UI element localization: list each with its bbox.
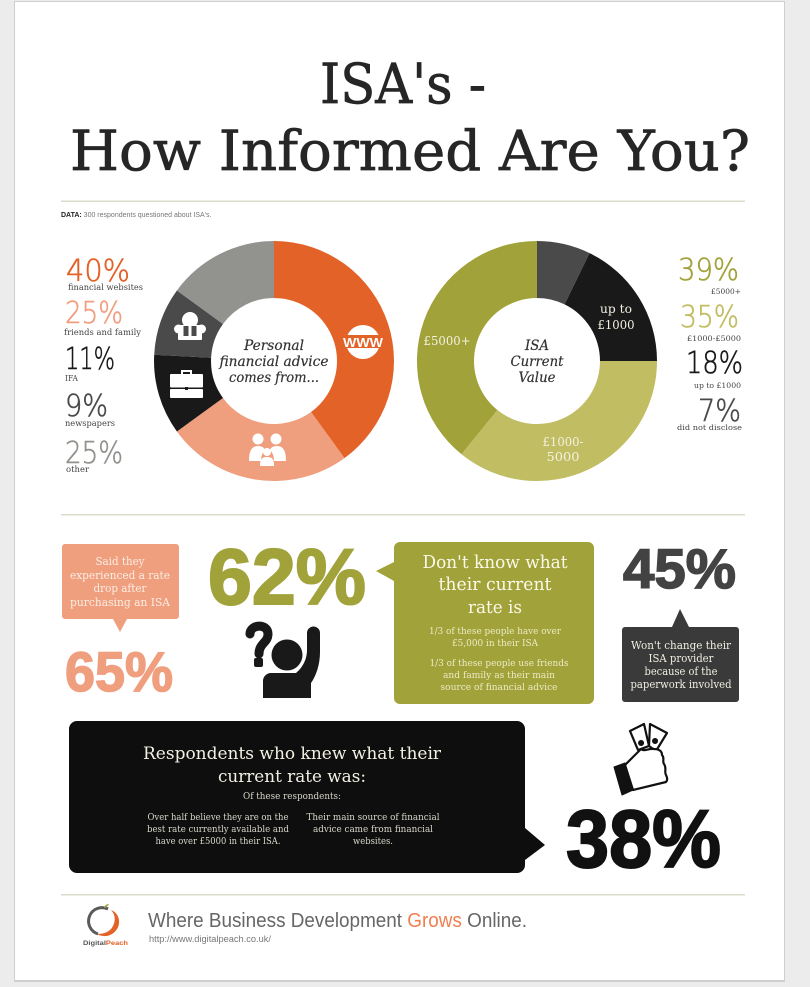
- callout: respondents who knew: current rate was:: [218, 767, 366, 787]
- stat: 45%: 45%: [623, 537, 736, 600]
- donut center label: Current: [510, 354, 564, 370]
- callout: rate drop: purchasing an ISA: [70, 596, 171, 609]
- segment labels: £1000: [598, 317, 635, 332]
- callout: respondents who knew: Their main source of financial: [306, 812, 440, 823]
- footer url: http://www.digitalpeach.co.uk/: [149, 934, 271, 944]
- legend: personal financial advice: 40%: [66, 254, 130, 289]
- legend: personal financial advice: 25%: [65, 296, 123, 331]
- segment labels: £1000-: [542, 434, 584, 449]
- legend: ISA current value: 35%: [680, 300, 739, 335]
- icon: raised hand with question mark: [250, 626, 320, 698]
- legend: ISA current value: 39%: [678, 253, 739, 288]
- callout: don't know current rate: and family as their main: [443, 670, 555, 681]
- segment labels: 5000: [546, 449, 580, 464]
- callout: won't change provider: because of the: [644, 665, 718, 678]
- footer tagline: Where Business Development Grows Online.: [148, 910, 527, 932]
- callout: don't know current rate: 1/3 of these people have over: [429, 626, 561, 637]
- donut center label: financial advice: [218, 354, 329, 370]
- callout: rate drop: Said they: [96, 555, 145, 568]
- legend: personal financial advice: financial websites: [68, 283, 143, 292]
- footer logo: [83, 904, 128, 947]
- callout: won't change provider: Won't change their: [631, 639, 732, 652]
- legend: personal financial advice: [64, 254, 143, 474]
- legend: ISA current value: 7%: [698, 394, 741, 429]
- donut center label: Value: [518, 370, 556, 386]
- segment labels: £5000+: [424, 333, 470, 348]
- callout: don't know current rate: rate is: [468, 597, 522, 618]
- callout: won't change provider: ISA provider: [648, 652, 714, 665]
- callout: respondents who knew: Over half believe they are on the: [148, 812, 289, 823]
- callout: rate drop: experienced a rate: [70, 569, 170, 582]
- legend: ISA current value: did not disclose: [677, 423, 743, 432]
- callout: respondents who knew: advice came from financial: [313, 824, 433, 835]
- callout: won't change provider: [622, 609, 739, 702]
- legend: personal financial advice: friends and family: [64, 328, 141, 337]
- legend: ISA current value: £5000+: [711, 287, 741, 296]
- title: [70, 52, 750, 183]
- callout: rate drop: drop after: [94, 582, 147, 595]
- title: ISA's -: [320, 52, 486, 116]
- callout: respondents who knew: best rate currently available and: [147, 824, 289, 835]
- donut center label: ISA: [524, 338, 549, 354]
- callout: won't change provider: paperwork involved: [630, 678, 732, 691]
- legend: ISA current value: [677, 253, 743, 432]
- footer logo: Digital Peach: [83, 940, 128, 947]
- legend: personal financial advice: other: [66, 465, 89, 474]
- callout: don't know current rate: £5,000 in their ISA: [452, 638, 538, 649]
- donut center label: comes from...: [229, 370, 319, 386]
- callout: respondents who knew: [69, 721, 545, 873]
- callout: respondents who knew: websites.: [353, 836, 393, 847]
- donut chart: personal financial advice: [154, 241, 394, 481]
- icon: family: [249, 434, 286, 466]
- legend: personal financial advice: 9%: [65, 389, 108, 424]
- legend: personal financial advice: 25%: [65, 436, 123, 471]
- legend: personal financial advice: 11%: [65, 342, 115, 377]
- callout: respondents who knew: Of these respondents:: [243, 792, 341, 802]
- callout: don't know current rate: [376, 542, 594, 704]
- donut center label: [218, 338, 329, 386]
- segment labels: up to: [600, 301, 632, 316]
- segment labels: [424, 301, 635, 464]
- stat: 65%: 65%: [65, 640, 173, 703]
- callout: don't know current rate: their current: [438, 574, 552, 595]
- legend: ISA current value: 18%: [686, 346, 743, 381]
- icon: newspaper reader: [174, 312, 206, 340]
- icon: hand holding money: [614, 724, 667, 795]
- callout: respondents who knew: Respondents who knew what their: [143, 744, 442, 764]
- donut center label: [510, 338, 564, 386]
- icon: www: [342, 325, 384, 359]
- callout: don't know current rate: Don't know what: [422, 552, 568, 573]
- legend: personal financial advice: IFA: [65, 374, 78, 383]
- stat: 62%: 62%: [208, 532, 366, 621]
- legend: ISA current value: up to £1000: [694, 381, 741, 390]
- callout: don't know current rate: 1/3 of these people use friends: [430, 658, 569, 669]
- donut chart: ISA current value: [417, 241, 657, 481]
- icon: www: WWW: [343, 335, 384, 350]
- data note: DATA: 300 respondents questioned about ISA's.: [61, 212, 212, 219]
- callout: rate drop: [62, 544, 179, 632]
- callout: don't know current rate: source of financial advice: [440, 682, 558, 693]
- stat: 38%: 38%: [566, 794, 721, 885]
- donut center label: Personal: [243, 338, 304, 354]
- legend: personal financial advice: newspapers: [65, 419, 115, 428]
- legend: ISA current value: £1000-£5000: [687, 334, 741, 343]
- title: How Informed Are You?: [70, 119, 750, 183]
- callout: respondents who knew: have over £5000 in their ISA.: [156, 836, 280, 847]
- icon: briefcase: [170, 370, 203, 398]
